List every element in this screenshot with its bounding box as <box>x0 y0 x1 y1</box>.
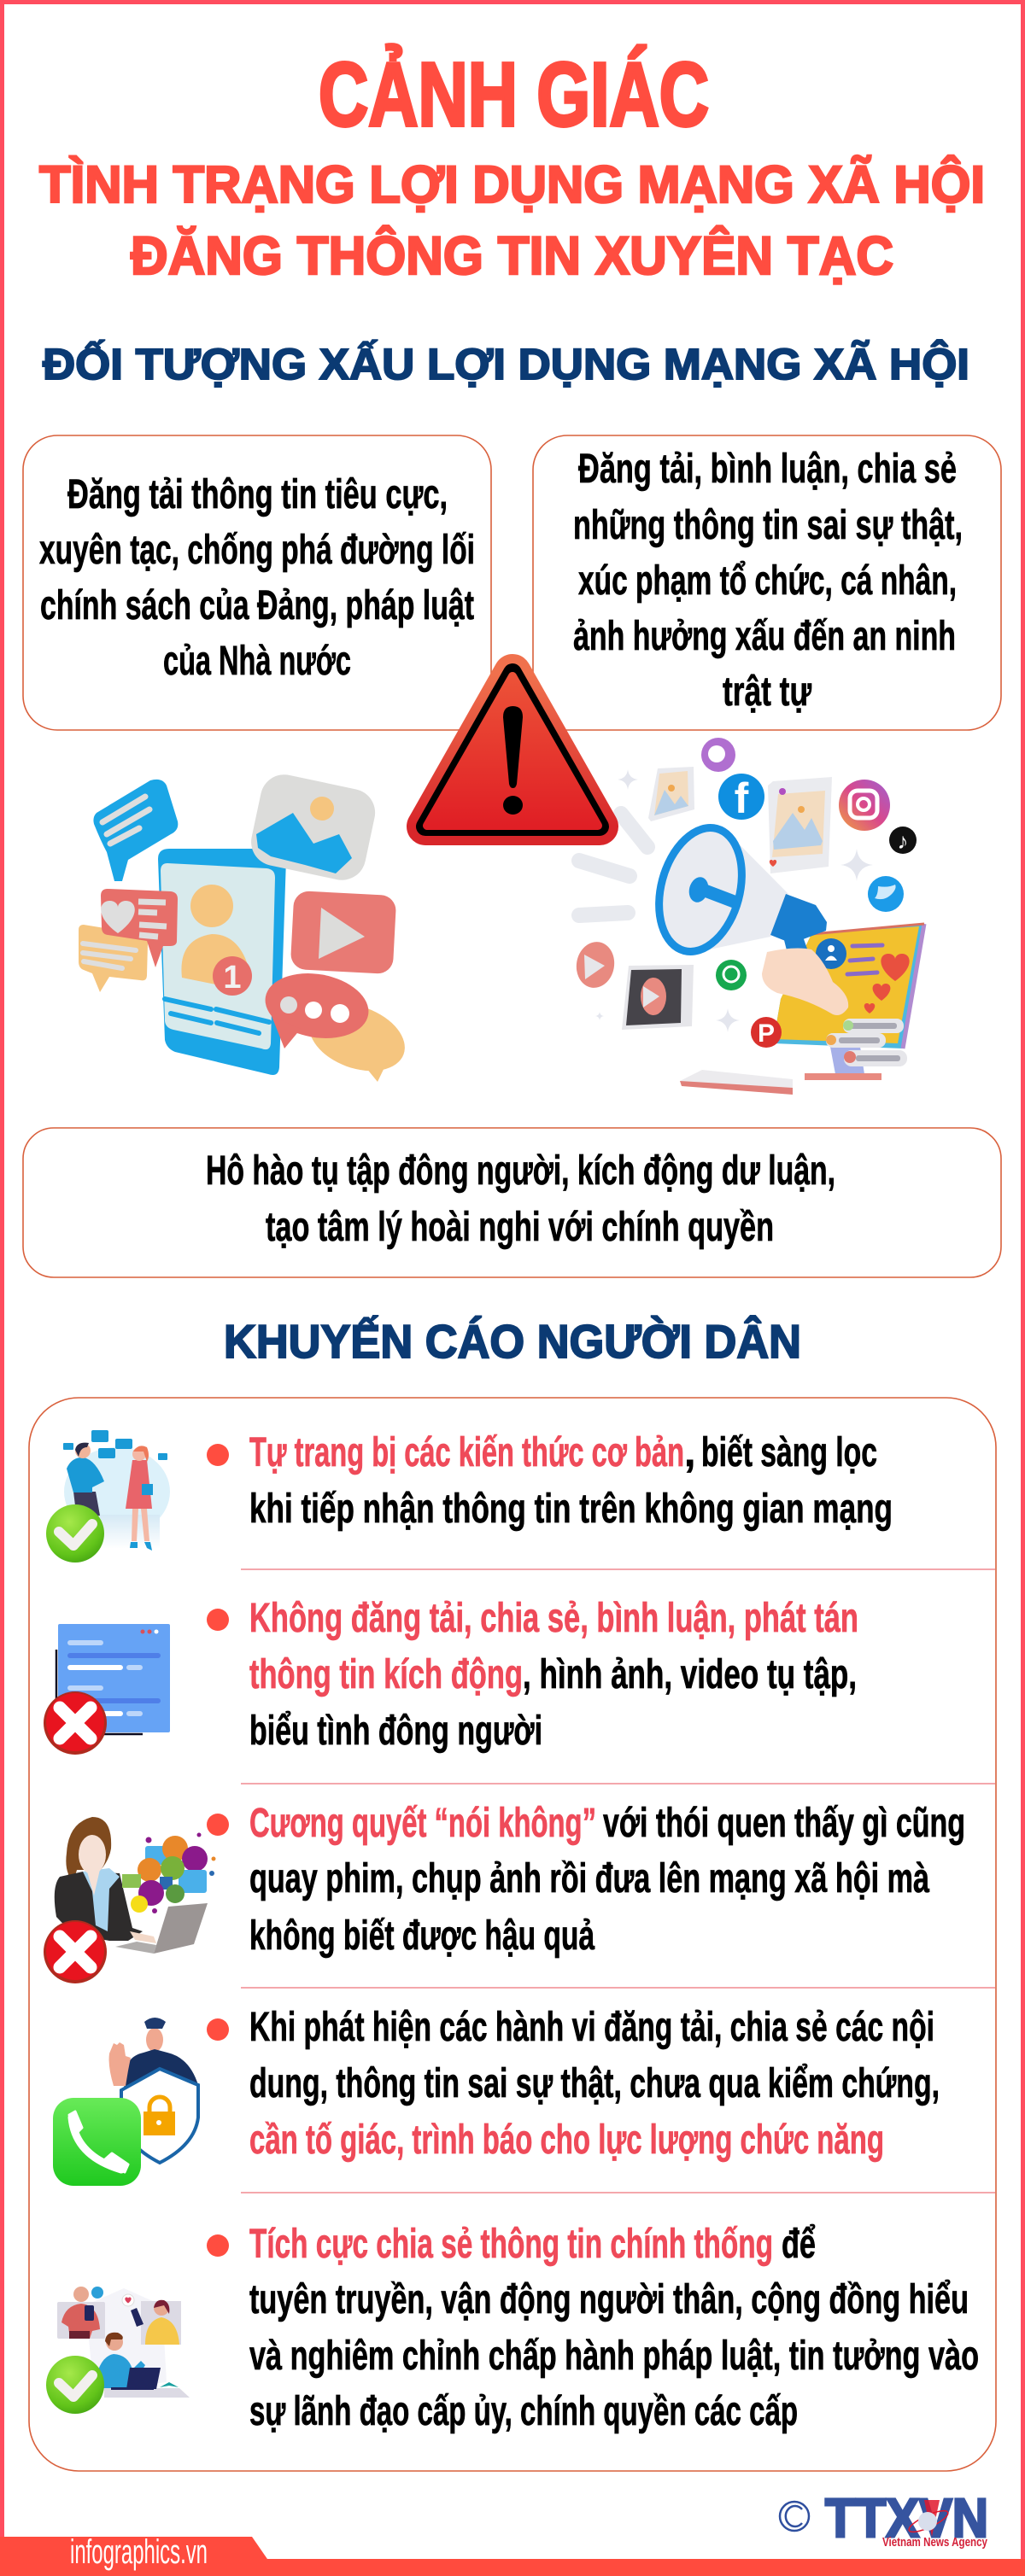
panel: false information <box>533 435 1001 730</box>
title: CẢNH GIÁC <box>319 44 709 145</box>
red chat bubble <box>261 966 373 1049</box>
social icons: P <box>758 1019 775 1048</box>
item 2: biểu tình đông người <box>249 1709 542 1754</box>
panel: negative information: chính sách của Đảng, pháp luật <box>40 583 474 628</box>
icon: people video calling with check <box>46 2287 190 2414</box>
panel: incitement: tạo tâm lý hoài nghi với chính quyền <box>266 1205 774 1250</box>
monitor <box>773 924 924 1080</box>
picture post card <box>768 777 832 873</box>
item 1: , <box>684 1430 695 1475</box>
notification badge <box>213 956 252 996</box>
video card <box>290 891 396 974</box>
item 3: không biết được hậu quả <box>249 1913 594 1959</box>
item 5 <box>207 2222 979 2434</box>
title <box>39 44 985 286</box>
footer band: infographics.vn <box>70 2533 208 2571</box>
logo: TTXVN: Vietnam News Agency <box>882 2535 988 2550</box>
panel: negative information: Đăng tải thông tin tiêu cực, <box>67 472 448 517</box>
icon: police, shield and phone <box>53 2018 198 2186</box>
illustration: megaphone and social media <box>573 738 924 1095</box>
icon: document with cross <box>44 1624 170 1755</box>
heading: bad actors: ĐỐI TƯỢNG XẤU LỢI DỤNG MẠNG XÃ HỘI <box>43 339 969 388</box>
panel: negative information: của Nhà nước <box>163 639 351 684</box>
item 2 <box>207 1596 858 1754</box>
footer band <box>0 2533 1025 2576</box>
item 1: Tự trang bị các kiến thức cơ bản <box>249 1430 684 1475</box>
item 2: thông tin kích động <box>249 1652 523 1697</box>
illustration: phone and social bubbles <box>79 770 414 1084</box>
speed lines <box>579 814 647 915</box>
item 3: Cương quyết “nói không” <box>249 1801 596 1846</box>
icon: woman with laptop and cross <box>44 1817 215 1983</box>
item 2: , hình ảnh, video tụ tập, <box>523 1652 857 1697</box>
item 5: sự lãnh đạo cấp ủy, chính quyền các cấp <box>249 2389 798 2434</box>
item 3 <box>207 1801 965 1959</box>
orange chat bubble <box>300 991 414 1084</box>
icon: warning triangle <box>425 673 600 827</box>
social icons: f <box>735 774 749 822</box>
title: ĐĂNG THÔNG TIN XUYÊN TẠC <box>131 225 893 286</box>
logo: TTXVN: TTXVN <box>825 2487 988 2549</box>
image card <box>247 770 379 885</box>
video tile <box>622 965 694 1030</box>
icon: two people talking with check <box>46 1430 170 1563</box>
keyboard <box>680 1070 793 1095</box>
title: TÌNH TRẠNG LỢI DỤNG MẠNG XÃ HỘI <box>39 155 985 213</box>
item 5: để <box>782 2222 816 2267</box>
notification badge: 1 <box>223 960 242 996</box>
panel: recommendations <box>29 1398 996 2471</box>
heart message bubble <box>101 889 178 967</box>
picture card small <box>648 767 694 821</box>
panel: incitement <box>23 1128 1001 1277</box>
list pills <box>826 1019 907 1066</box>
sparkles <box>595 769 873 1032</box>
item 4 <box>207 2005 940 2163</box>
blue speech bubble <box>93 780 178 881</box>
orange message bubble <box>79 925 148 992</box>
social icons: ♪ <box>897 828 909 854</box>
red play button <box>573 939 618 990</box>
hand <box>762 949 848 1015</box>
item 1 <box>207 1430 893 1532</box>
megaphone <box>646 819 827 961</box>
heading: recommendations: KHUYẾN CÁO NGƯỜI DÂN <box>224 1315 801 1368</box>
phone <box>158 849 286 1075</box>
item 1: biết sàng lọc <box>701 1430 877 1475</box>
panel: false information: trật tự <box>723 669 811 715</box>
panel: negative information <box>23 435 491 730</box>
panel: negative information: xuyên tạc, chống phá đường lối <box>39 528 475 573</box>
social icons <box>701 738 917 1048</box>
item 5: Tích cực chia sẻ thông tin chính thống <box>249 2222 773 2267</box>
